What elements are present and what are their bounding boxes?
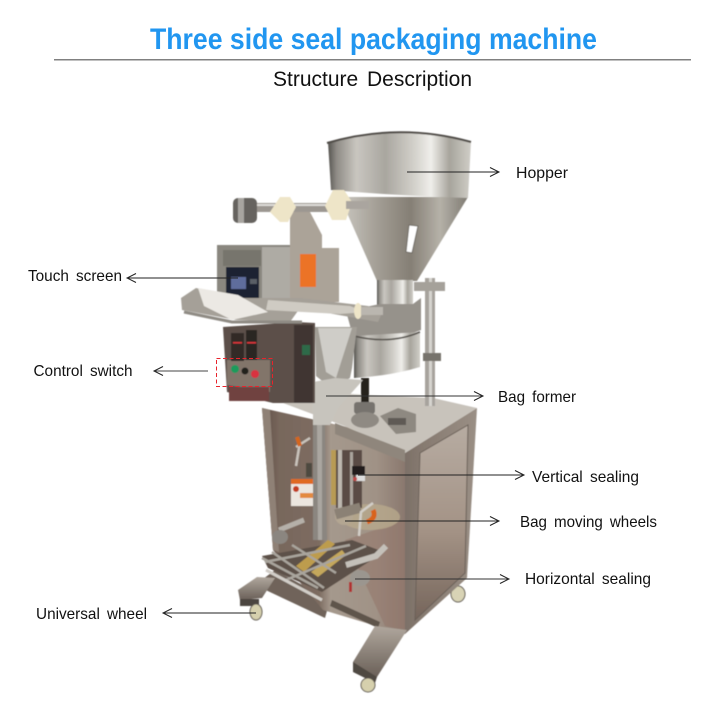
label: Hopper: Hopper	[516, 165, 569, 182]
hanging film and bag former funnel	[313, 327, 363, 425]
lower control box	[223, 322, 315, 403]
left base bar	[255, 570, 330, 618]
machine body right side	[405, 408, 477, 634]
deck front edge	[335, 423, 405, 462]
deck spindle	[351, 378, 379, 428]
reddish reflection	[345, 520, 405, 630]
label: Bag moving wheels: Bag moving wheels	[520, 514, 657, 531]
bag moving wheels	[334, 503, 374, 536]
small meter	[306, 463, 312, 477]
label: Bag former: Bag former	[498, 389, 577, 406]
sealing block on deck	[380, 408, 416, 434]
hopper slot	[406, 225, 418, 253]
right foot and caster	[353, 626, 407, 692]
body left edge shading	[262, 408, 279, 552]
horizontal sealing assembly	[262, 520, 386, 600]
title: Three side seal packaging machine	[150, 23, 597, 56]
label: Horizontal sealing: Horizontal sealing	[525, 571, 651, 588]
control box upper with touch screen	[217, 245, 290, 301]
control switch highlight box	[216, 358, 272, 386]
hopper cylinder	[328, 132, 471, 198]
body top deck	[275, 392, 477, 453]
warning label	[291, 479, 313, 506]
hopper rim	[327, 132, 471, 143]
film tray with plastic film	[181, 288, 383, 322]
machine body front face	[262, 408, 405, 634]
orange sticker	[300, 254, 316, 287]
machine illustration	[181, 132, 477, 692]
vertical sealing assembly	[331, 450, 365, 510]
label: Universal wheel: Universal wheel	[36, 606, 147, 623]
hopper neck	[377, 280, 413, 314]
tension handle	[296, 438, 310, 466]
label: Control switch: Control switch	[34, 363, 132, 380]
left foot and caster	[238, 577, 275, 620]
orange knob	[297, 437, 300, 446]
film bracket plate	[290, 212, 339, 302]
label: Touch screen: Touch screen	[28, 268, 122, 285]
support column	[414, 278, 445, 406]
forming tube	[313, 425, 327, 540]
front bottom strip	[330, 600, 380, 628]
hopper cone	[340, 197, 468, 281]
film roller	[233, 197, 368, 223]
title divider	[54, 59, 691, 60]
front film roll	[325, 190, 369, 220]
subtitle: Structure Description	[273, 68, 472, 91]
side door	[415, 425, 468, 620]
pale wheel reflection	[340, 504, 400, 530]
label: Vertical sealing: Vertical sealing	[532, 469, 639, 486]
rear caster wheel	[451, 586, 465, 602]
dosing disc	[346, 298, 421, 378]
